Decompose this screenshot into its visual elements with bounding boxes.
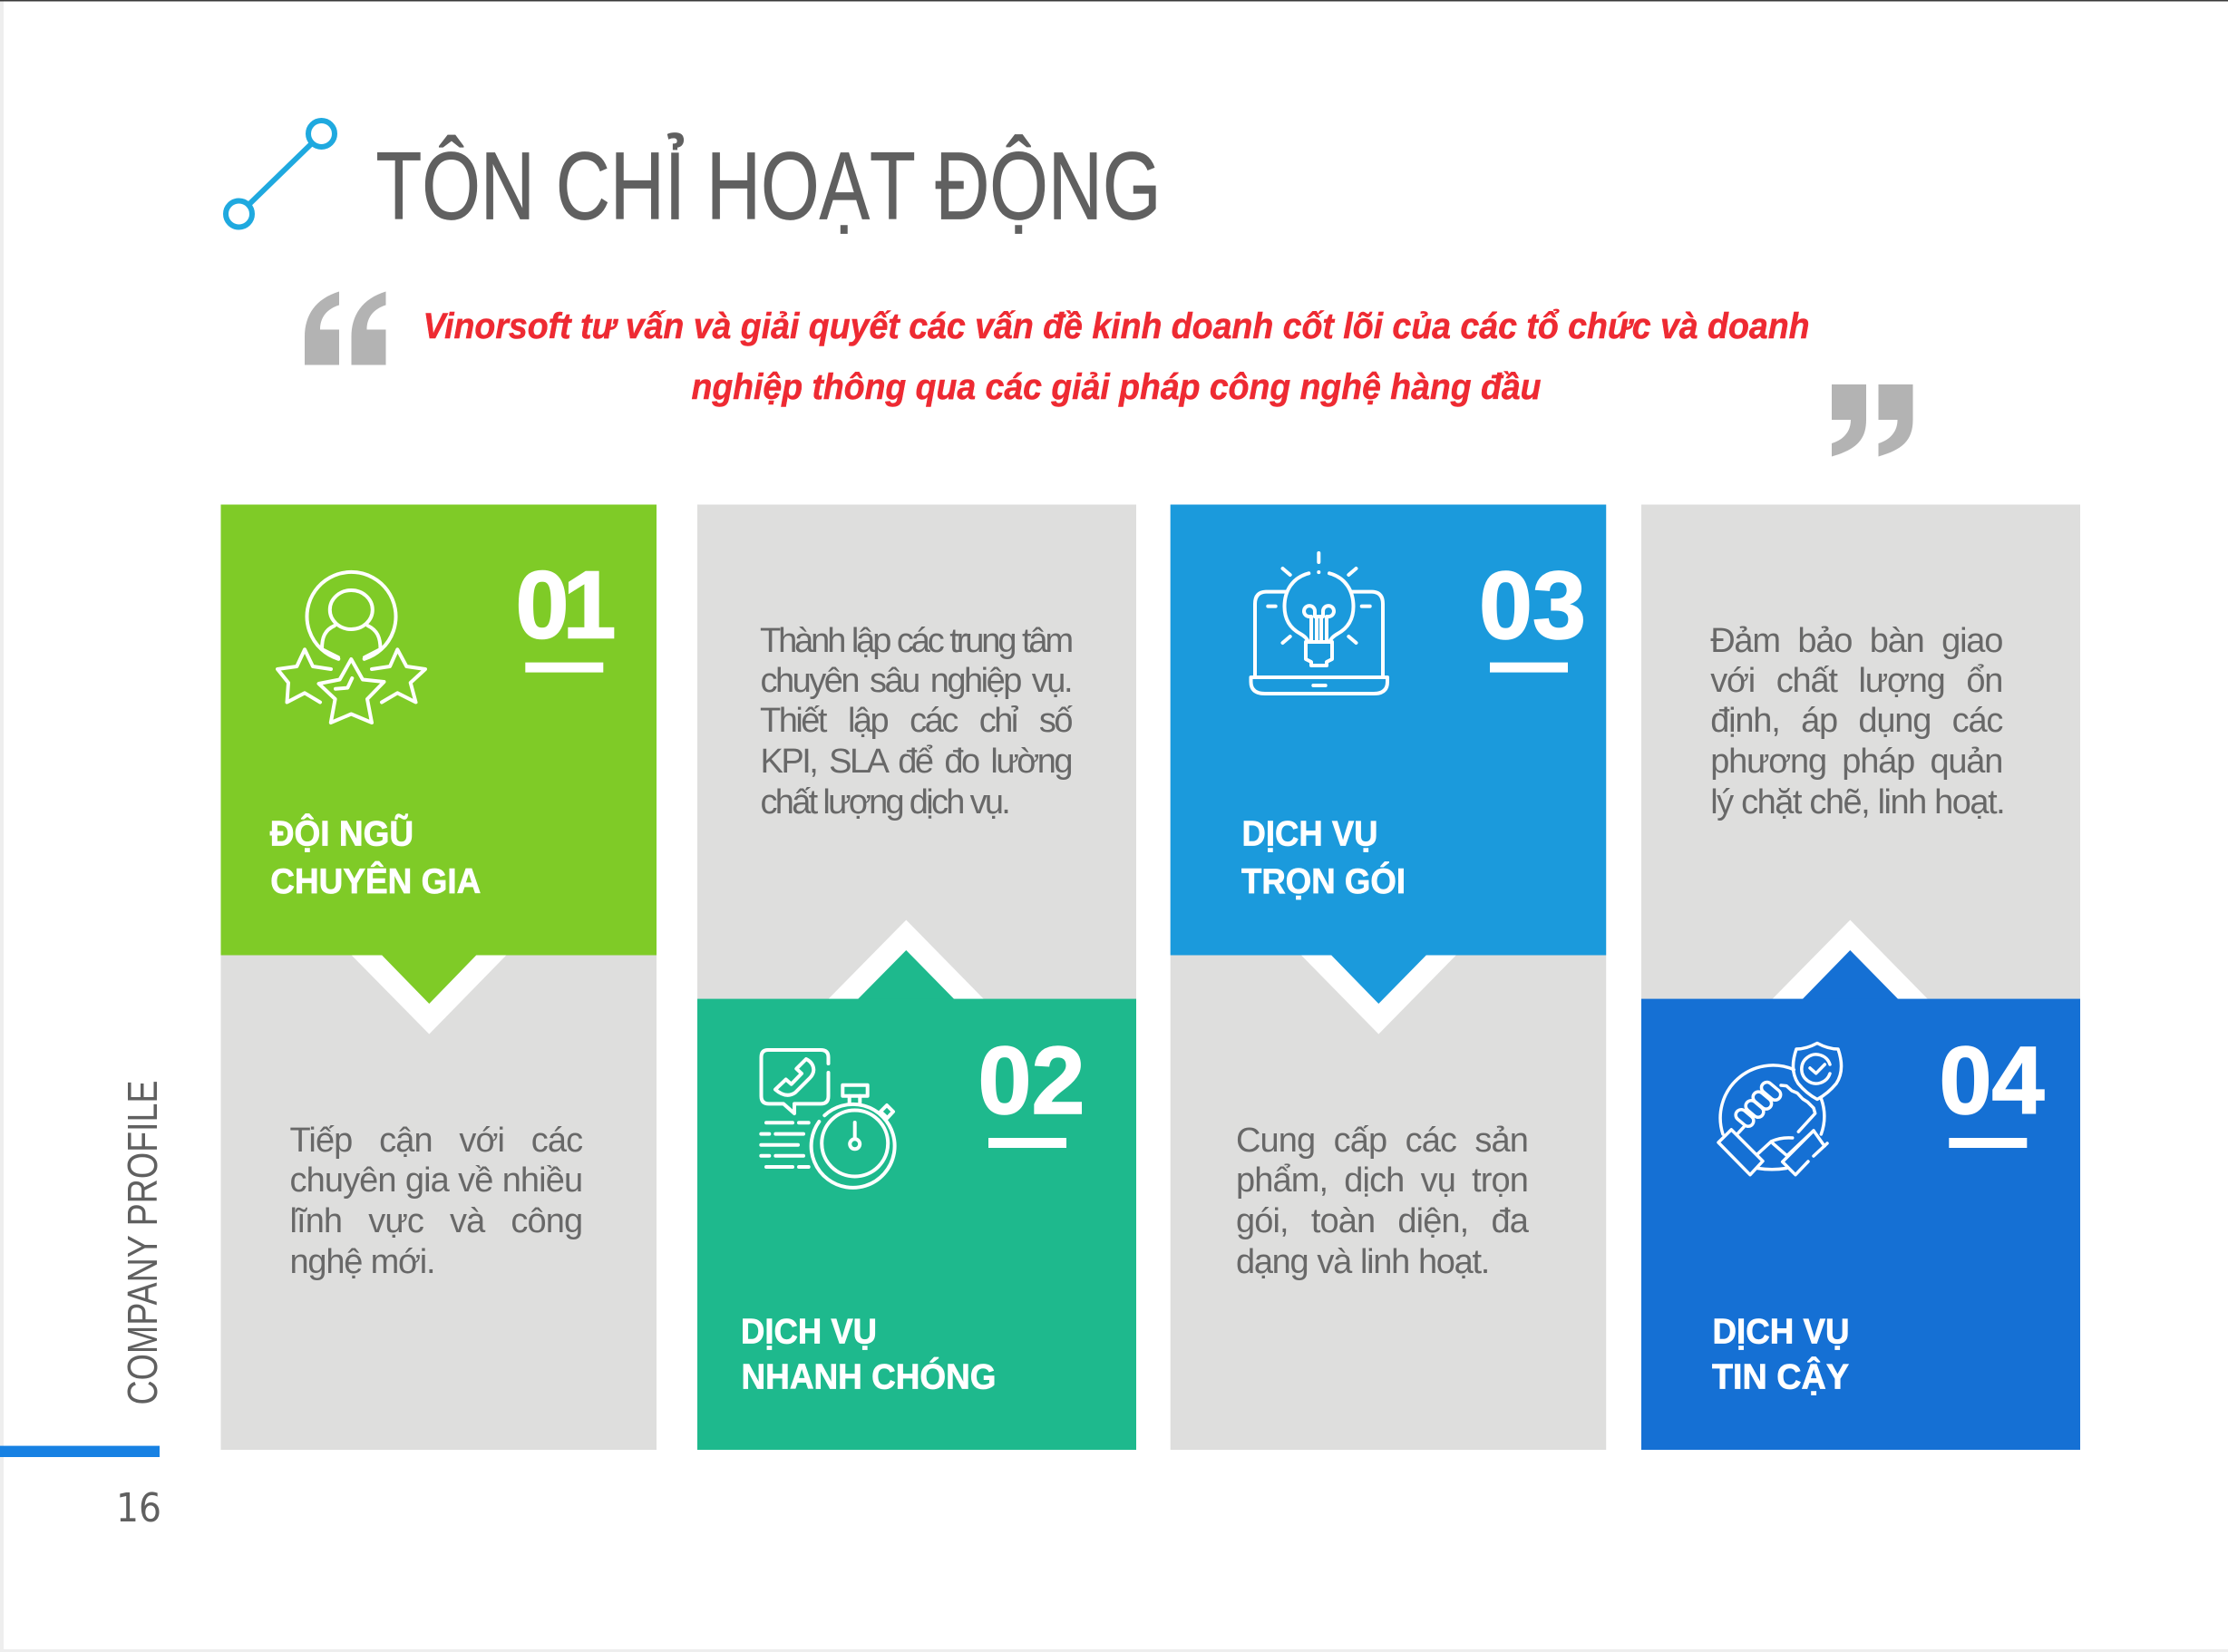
heading 03: TRỌN GÓI [1241, 861, 1406, 901]
heading 04 [1712, 1312, 1850, 1397]
quote text: nghiệp thông qua các giải pháp công nghệ hàng đầu [691, 367, 1542, 407]
heading 03 [1241, 815, 1406, 901]
body text 03: gói, toàn diện, đa [1236, 1202, 1528, 1240]
icon: expert stars [277, 572, 425, 723]
icon: phone and stopwatch [761, 1050, 895, 1188]
body text 03: phẩm, dịch vụ trọn [1236, 1161, 1528, 1200]
heading 02: NHANH CHÓNG [742, 1357, 996, 1397]
body text 04: phương pháp quản [1710, 742, 2002, 780]
page number: 16 [116, 1485, 161, 1531]
icon: opening quote mark [305, 292, 386, 364]
body text 04: với chất lượng ổn [1710, 662, 2002, 700]
side label: company profile: COMPANY PROFILE [119, 1081, 166, 1405]
body text 04: lý chặt chẽ, linh hoạt. [1710, 783, 2004, 821]
icon: laptop and light bulb [1251, 553, 1387, 694]
body text 01: lĩnh vực và công [290, 1202, 582, 1240]
heading 04: DỊCH VỤ [1712, 1312, 1850, 1351]
number 02: 02 [978, 1027, 1085, 1134]
body text 04: Đảm bảo bàn giao [1710, 622, 2002, 660]
quote text: Vinorsoft tư vấn và giải quyết các vấn đề kinh doanh cốt lõi của các tổ chức và doanh [423, 306, 1810, 346]
heading 03: DỊCH VỤ [1242, 815, 1378, 854]
panel: 03 dịch vụ trọn gói [1171, 504, 1606, 1450]
body text 02: chuyên sâu nghiệp vụ. [760, 662, 1071, 700]
panel: 01 đội ngũ chuyên gia [221, 504, 657, 1450]
body text 02: KPI, SLA để đo lường [760, 742, 1071, 780]
body text 01: nghệ mới. [290, 1243, 434, 1281]
panel: 02 dịch vụ nhanh chóng [697, 504, 1136, 1450]
icon: handshake and shield [1718, 1043, 1842, 1175]
body text 02: Thành lập các trung tâm [760, 622, 1071, 660]
body text 04 [1710, 617, 2009, 825]
body text 01 [290, 1115, 589, 1288]
body text 03: dạng và linh hoạt. [1236, 1243, 1489, 1281]
heading 01: CHUYÊN GIA [270, 861, 481, 901]
body text 04: định, áp dụng các [1710, 702, 2002, 740]
heading 02 [741, 1312, 996, 1397]
number 01: 01 [515, 551, 616, 658]
heading 02: DỊCH VỤ [741, 1312, 877, 1351]
body text 03: Cung cấp các sản [1236, 1122, 1528, 1160]
heading 01: ĐỘI NGŨ [270, 813, 413, 854]
body text 02 [760, 617, 1077, 825]
icon: closing quote mark [1832, 384, 1913, 457]
body text 02: Thiết lập các chỉ số [760, 702, 1071, 740]
body text 03 [1236, 1115, 1535, 1288]
title: TÔN CHỈ HOẠT ĐỘNG [375, 132, 1161, 239]
icon: title connector [226, 121, 335, 227]
number 03: 03 [1479, 552, 1586, 659]
quote text [423, 306, 1810, 407]
body text 02: chất lượng dịch vụ. [760, 783, 1008, 821]
body text 01: Tiếp cận với các [290, 1122, 582, 1160]
heading 04: TIN CẬY [1712, 1357, 1849, 1397]
heading 01 [270, 813, 481, 901]
body text 01: chuyên gia về nhiều [290, 1161, 582, 1200]
number 04: 04 [1939, 1027, 2045, 1134]
panel: 04 dịch vụ tin cậy [1641, 504, 2080, 1450]
blue accent bar [0, 1446, 160, 1457]
